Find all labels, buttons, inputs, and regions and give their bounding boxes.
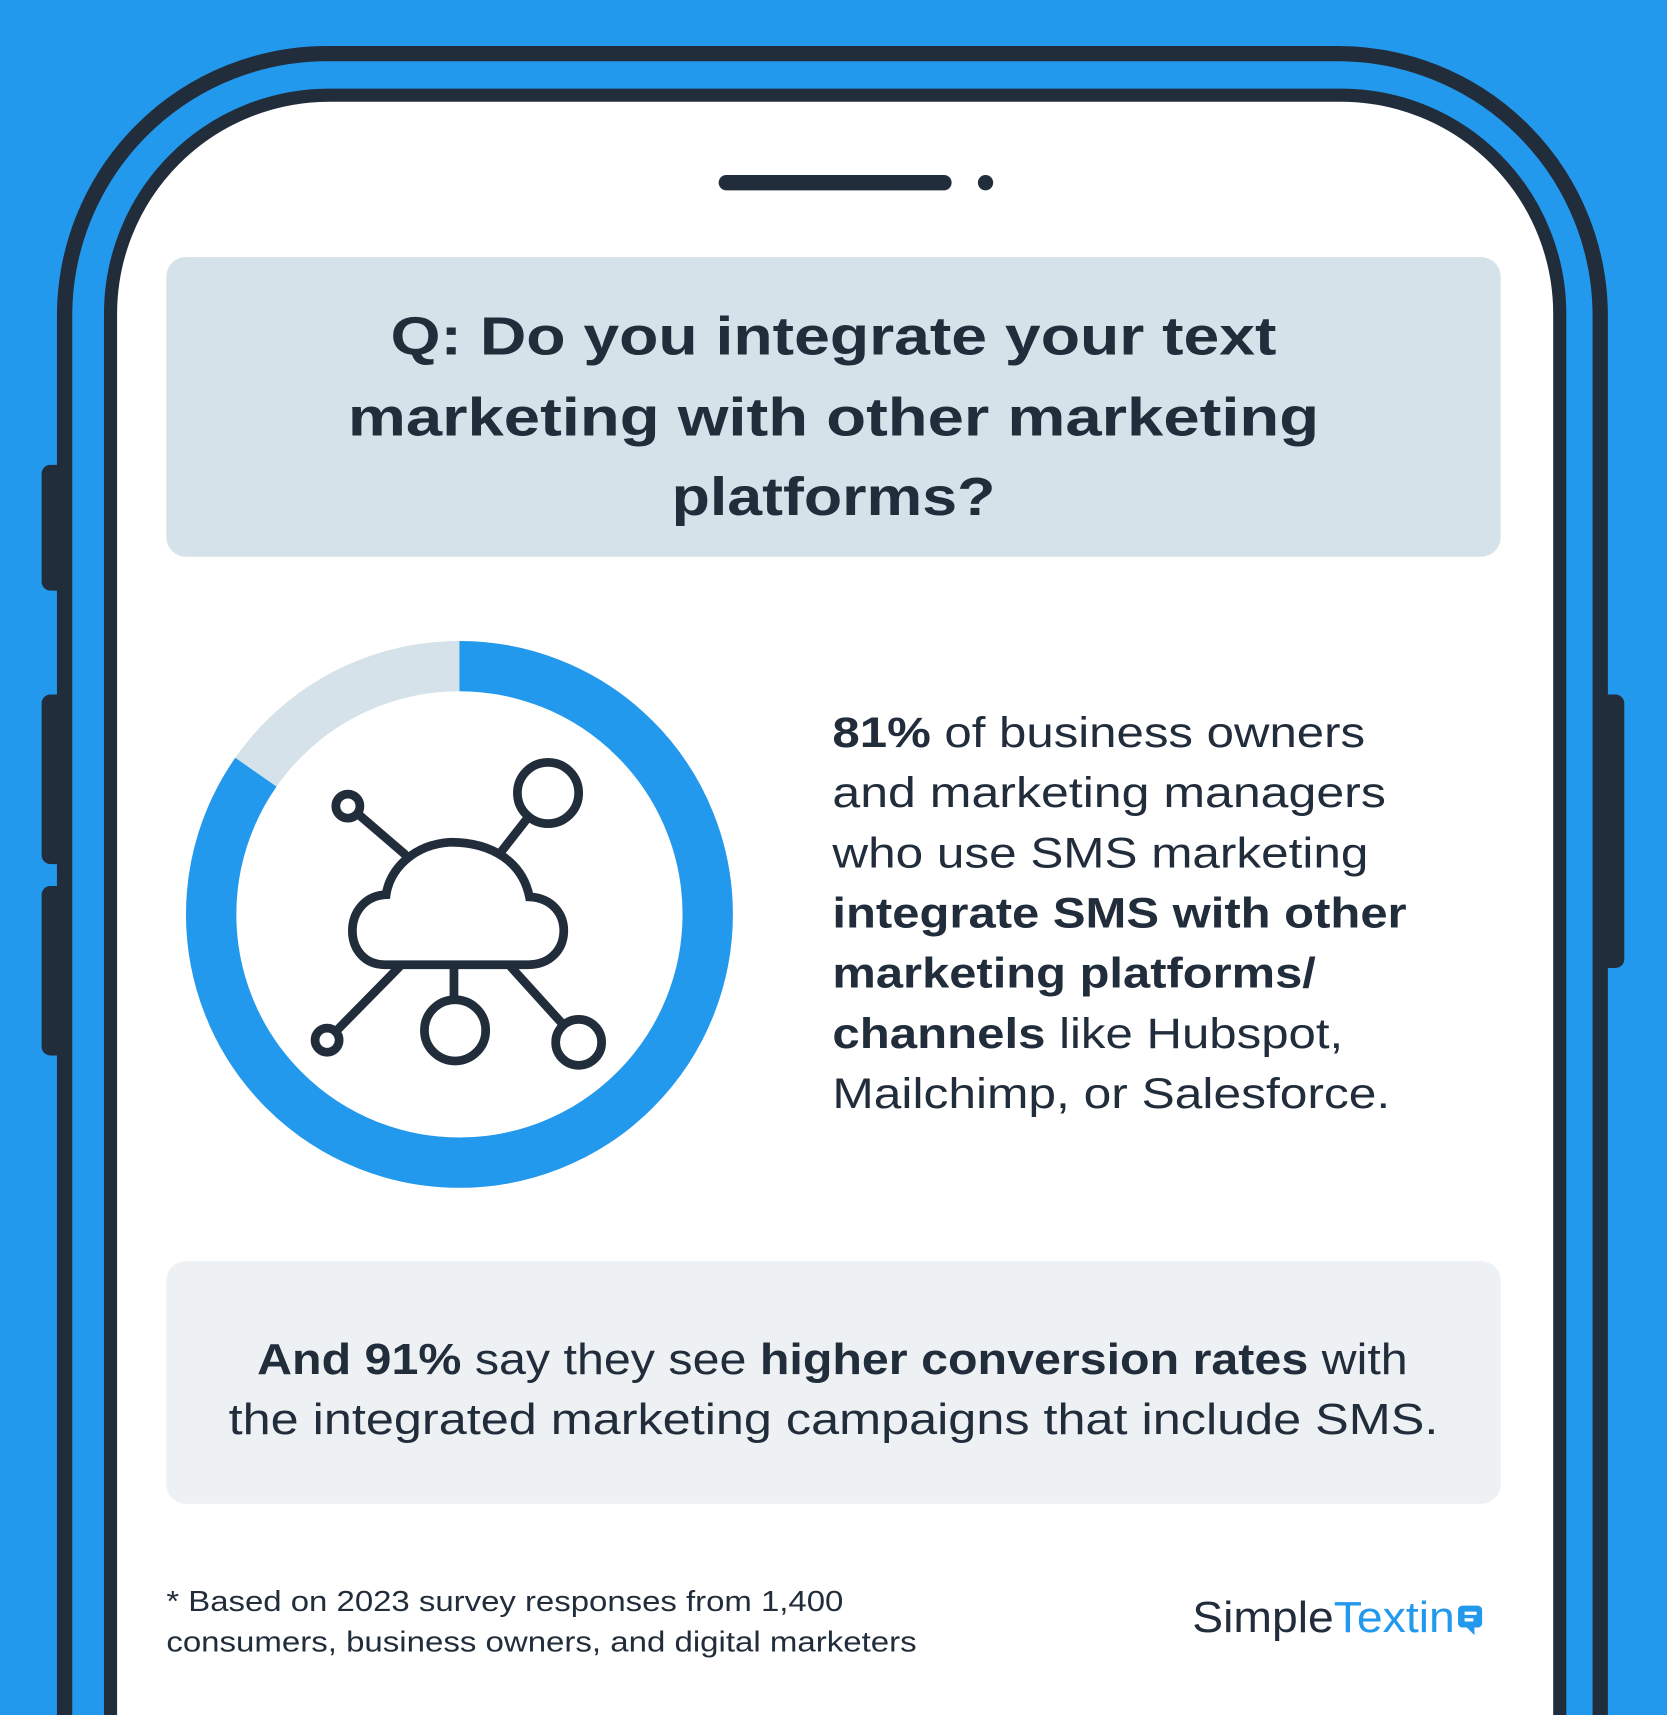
bottom callout panel: And 91% say they see higher conversion rates with xyxy=(257,1335,1408,1384)
bottom callout panel xyxy=(166,1261,1501,1504)
title panel: marketing with other marketing xyxy=(348,387,1319,447)
stat text: 81%: who use SMS marketing xyxy=(831,829,1368,877)
bottom callout panel: the integrated marketing campaigns that include SMS. xyxy=(229,1395,1438,1444)
title panel: platforms? xyxy=(672,467,995,527)
logo: SimpleTexting: SimpleTextin xyxy=(1192,1593,1455,1642)
title panel: Q: Do you integrate your text xyxy=(391,306,1277,366)
footnote: consumers, business owners, and digital marketers xyxy=(166,1627,917,1659)
stat text: 81%: 81% of business owners xyxy=(832,709,1365,757)
stat text: 81%: integrate SMS with other xyxy=(832,889,1407,937)
stat text: 81%: and marketing managers xyxy=(832,769,1386,817)
stat text: 81%: channels like Hubspot, xyxy=(832,1010,1343,1058)
stat text: 81% xyxy=(831,709,1407,1118)
stat text: 81%: marketing platforms/ xyxy=(832,950,1316,998)
title panel xyxy=(166,257,1501,557)
footnote: * Based on 2023 survey responses from 1,400 xyxy=(166,1586,843,1618)
stat text: 81%: Mailchimp, or Salesforce. xyxy=(832,1070,1390,1118)
donut chart 81% xyxy=(211,666,708,1163)
icon: cloud network xyxy=(315,762,602,1065)
phone: side buttons xyxy=(42,465,1624,1055)
phone speaker xyxy=(719,175,993,190)
footnote xyxy=(166,1586,917,1659)
